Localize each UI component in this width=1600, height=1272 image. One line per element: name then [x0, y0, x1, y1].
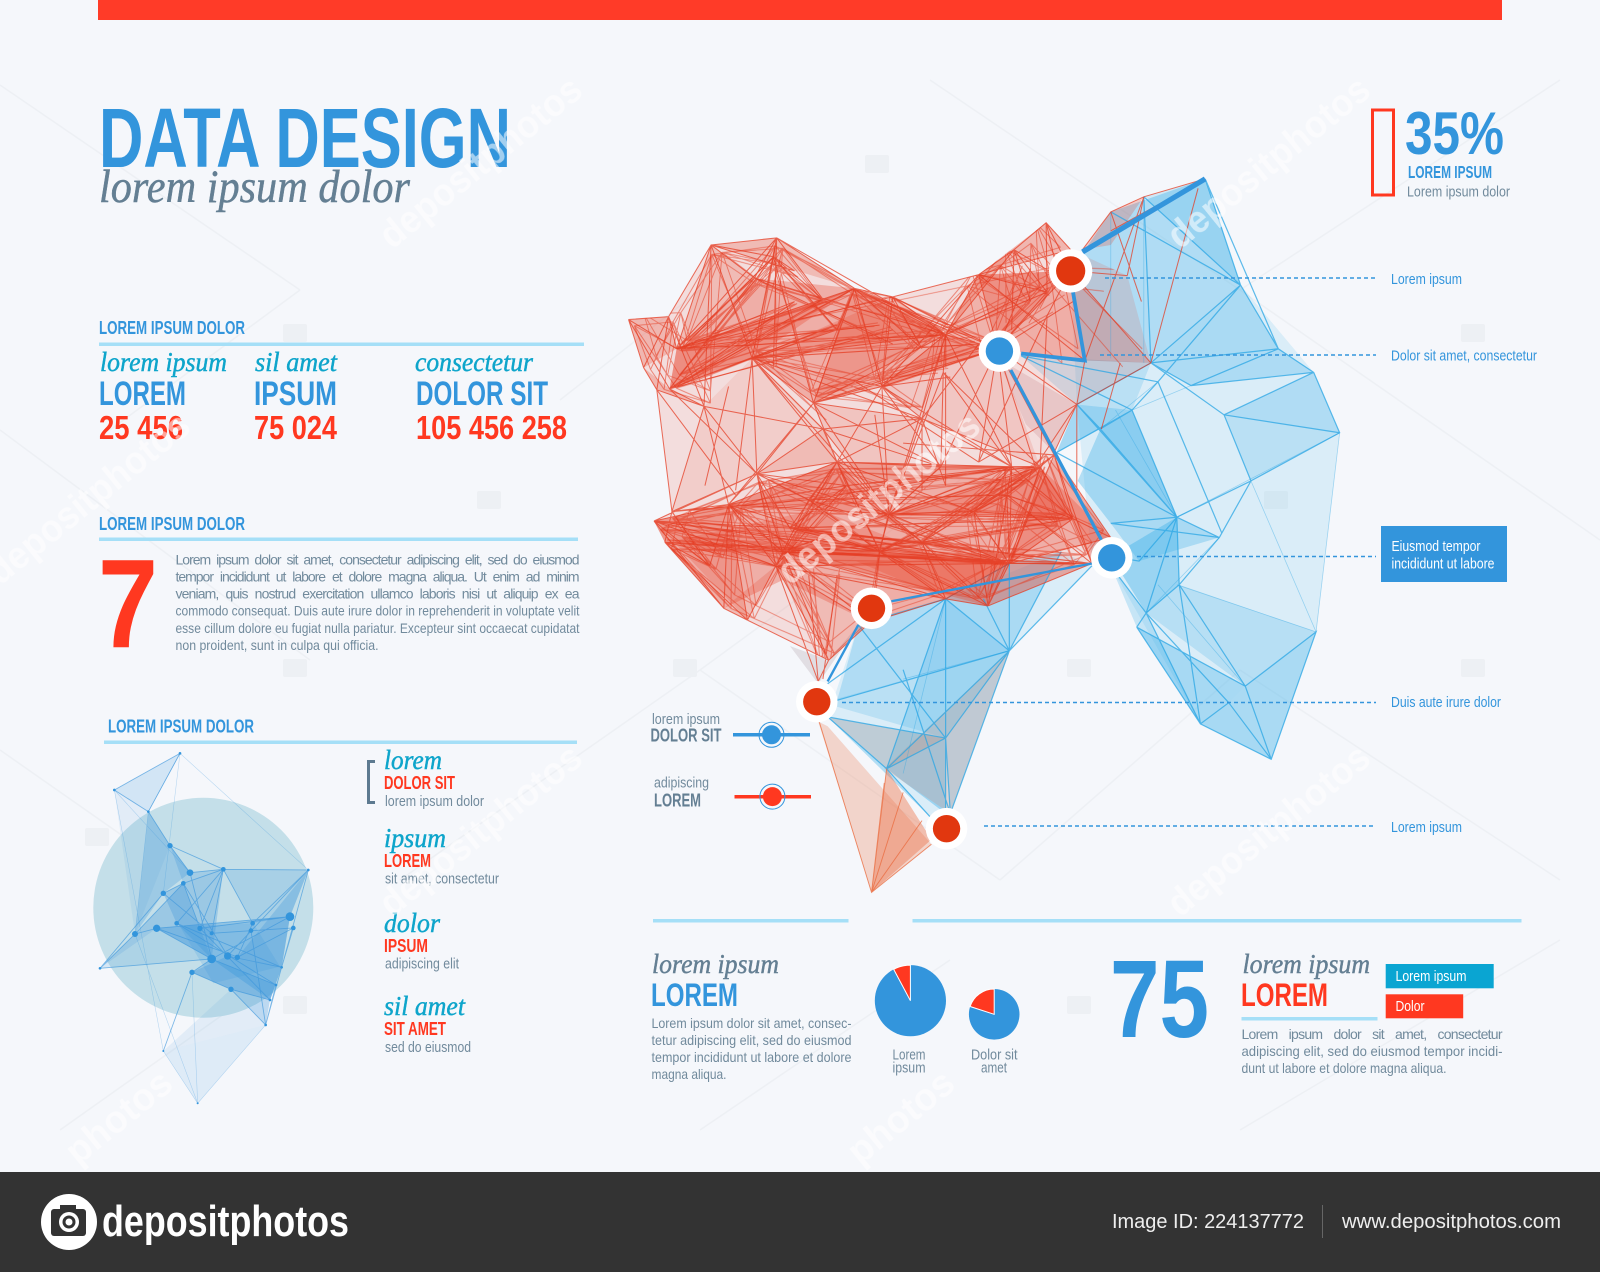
watermark: depositphotos	[769, 404, 988, 593]
heading: small network panel	[104, 716, 577, 744]
watermark: depositphotos	[371, 736, 590, 925]
tag: dolor	[1386, 994, 1463, 1018]
rules above bottom row	[653, 919, 1522, 922]
leader lines	[842, 278, 1376, 826]
panel: statistics: LOREM IPSUM DOLOR	[99, 318, 245, 338]
legend: blue	[650, 711, 810, 747]
panel: bottom right text: adipiscing elit, sed do eiusmod tempor incidi-	[1242, 1043, 1503, 1059]
footer band: depositphotos	[102, 1197, 349, 1246]
panel: bottom left text: tempor incididunt ut labore et dolore	[652, 1049, 852, 1065]
panel: statistics: DOLOR SIT	[416, 375, 548, 413]
panel: bottom left text	[651, 949, 852, 1082]
legend: red	[654, 774, 811, 810]
panel: bottom right text	[1241, 949, 1503, 1076]
callout box: incididunt ut labore	[1392, 556, 1494, 572]
footer band: Image ID: 224137772	[1112, 1211, 1304, 1233]
list: four labelled items: DOLOR SIT	[384, 773, 455, 793]
list: four labelled items: sed do eiusmod	[385, 1040, 471, 1056]
list: four labelled items: LOREM	[384, 851, 431, 871]
chart: pie one	[875, 965, 946, 1076]
watermark: depositphotos	[1159, 736, 1378, 925]
tag: lorem ipsum	[1386, 964, 1494, 988]
title: DATA DESIGN	[99, 91, 511, 185]
mesh: red lines	[628, 179, 1205, 681]
chart: pie one: Lorem	[892, 1048, 926, 1064]
tag: lorem ipsum: Lorem ipsum	[1396, 969, 1466, 985]
node: red lower	[796, 681, 838, 723]
node: red middle	[851, 588, 892, 629]
node: red bottom	[926, 808, 967, 849]
chart: pie two: Dolor sit	[971, 1048, 1018, 1064]
chart: pie two: amet	[981, 1060, 1007, 1076]
legend: red: LOREM	[654, 790, 701, 810]
list: four labelled items: sit amet, consectetur	[385, 872, 499, 888]
stat: 35 percent	[1372, 100, 1510, 200]
callout box	[1381, 526, 1507, 582]
chart: pie two	[969, 989, 1020, 1076]
watermark: photos	[57, 1062, 181, 1173]
footer band: www.depositphotos.com	[1341, 1211, 1561, 1233]
list: four labelled items: ipsum	[384, 823, 446, 853]
list: four labelled items: lorem	[384, 745, 442, 775]
legend: red: adipiscing	[654, 774, 709, 792]
panel: text block with number 7: 7	[98, 533, 158, 674]
chart: pie one: ipsum	[892, 1060, 926, 1076]
top bar	[98, 0, 1502, 20]
panel: bottom right text: dunt ut labore et dolore magna aliqua.	[1242, 1060, 1446, 1076]
heading: small network panel: LOREM IPSUM DOLOR	[108, 716, 254, 736]
callout labels: Lorem ipsum	[1391, 271, 1462, 288]
list: four labelled items: lorem ipsum dolor	[385, 794, 484, 810]
list: four labelled items: IPSUM	[384, 936, 428, 956]
mesh: extra red density	[631, 220, 1144, 679]
node: blue right	[1091, 537, 1132, 579]
legend: blue: DOLOR SIT	[650, 726, 722, 746]
panel: text block with number 7: commodo consequat. Duis aute irure dolor in reprehenderit in voluptate velit	[176, 602, 580, 618]
panel: statistics: LOREM	[99, 375, 186, 413]
stat: 35 percent: Lorem ipsum dolor	[1407, 184, 1510, 200]
stat: 35 percent: LOREM IPSUM	[1408, 162, 1492, 182]
list: four labelled items	[368, 745, 499, 1056]
watermark	[0, 68, 1378, 1173]
mesh: red fills	[628, 197, 1151, 684]
panel: bottom left text: LOREM	[651, 977, 738, 1013]
title	[99, 91, 511, 213]
tag: dolor: Dolor	[1396, 999, 1425, 1015]
panel: statistics: sil amet	[255, 347, 338, 377]
panel: bottom left text: tetur adipiscing elit, sed do eiusmod	[652, 1032, 852, 1048]
panel: bottom right text: Lorem ipsum dolor sit amet, consectetur	[1242, 1026, 1503, 1042]
node: blue upper	[979, 330, 1020, 372]
legend: blue: lorem ipsum	[652, 711, 720, 728]
panel: statistics	[99, 318, 584, 446]
panel: text block with number 7: veniam, quis nostrud exercitation ullamco laboris nisi ut aliquip ex ea	[176, 586, 580, 602]
panel: statistics: 75 024	[254, 409, 338, 446]
footer band	[0, 1172, 1600, 1272]
panel: text block with number 7: LOREM IPSUM DOLOR	[99, 514, 245, 534]
icon: camera logo	[41, 1194, 97, 1250]
panel: statistics: consectetur	[415, 347, 533, 377]
panel: bottom left text: Lorem ipsum dolor sit amet, consec-	[652, 1015, 852, 1031]
list: four labelled items: sil amet	[384, 991, 466, 1021]
panel: statistics: IPSUM	[254, 375, 337, 413]
node: red top	[1049, 249, 1092, 293]
panel: text block with number 7	[98, 514, 580, 674]
mesh: orange fills	[818, 651, 1009, 892]
callout labels: Dolor sit amet, consectetur	[1391, 348, 1537, 364]
big number 75: 75	[1110, 938, 1209, 1061]
panel: text block with number 7: non proident, sunt in culpa qui officia.	[176, 637, 378, 653]
mesh: blue fills	[823, 179, 1340, 818]
panel: bottom left text: lorem ipsum	[652, 949, 779, 979]
stat: 35 percent: 35%	[1405, 100, 1504, 167]
panel: statistics: 105 456 258	[416, 409, 567, 446]
connector lines	[1082, 179, 1205, 252]
panel: statistics: lorem ipsum	[100, 347, 227, 377]
panel: text block with number 7: esse cillum dolore eu fugiat nulla pariatur. Excepteur sint occaecat cupidatat	[176, 620, 580, 636]
callout labels	[1391, 271, 1537, 836]
list: four labelled items: adipiscing elit	[385, 956, 459, 972]
panel: bottom right text: LOREM	[1241, 977, 1328, 1013]
chart: main network mesh	[628, 179, 1340, 892]
callout labels: Lorem ipsum	[1391, 819, 1462, 836]
watermark: photos	[839, 1062, 963, 1173]
panel: bottom left text: magna aliqua.	[652, 1066, 726, 1082]
panel: statistics: 25 456	[99, 409, 183, 446]
list: four labelled items: SIT AMET	[384, 1019, 446, 1039]
title: lorem ipsum dolor	[99, 161, 411, 213]
watermark: depositphotos	[1159, 68, 1378, 257]
panel: bottom right text: lorem ipsum	[1242, 949, 1370, 979]
mesh: blue lines	[828, 179, 1340, 818]
callout box: Eiusmod tempor	[1392, 538, 1480, 555]
callout labels: Duis aute irure dolor	[1391, 694, 1501, 711]
watermark: depositphotos	[371, 68, 590, 257]
bracket icon	[368, 762, 375, 802]
list: four labelled items: dolor	[384, 908, 440, 938]
panel: text block with number 7: Lorem ipsum dolor sit amet, consectetur adipiscing elit, sed do eiusmod	[176, 552, 580, 568]
panel: text block with number 7: tempor incididunt ut labore et dolore magna aliqua. Ut enim ad minim	[176, 568, 580, 584]
chart: circle with small network	[93, 752, 313, 1104]
